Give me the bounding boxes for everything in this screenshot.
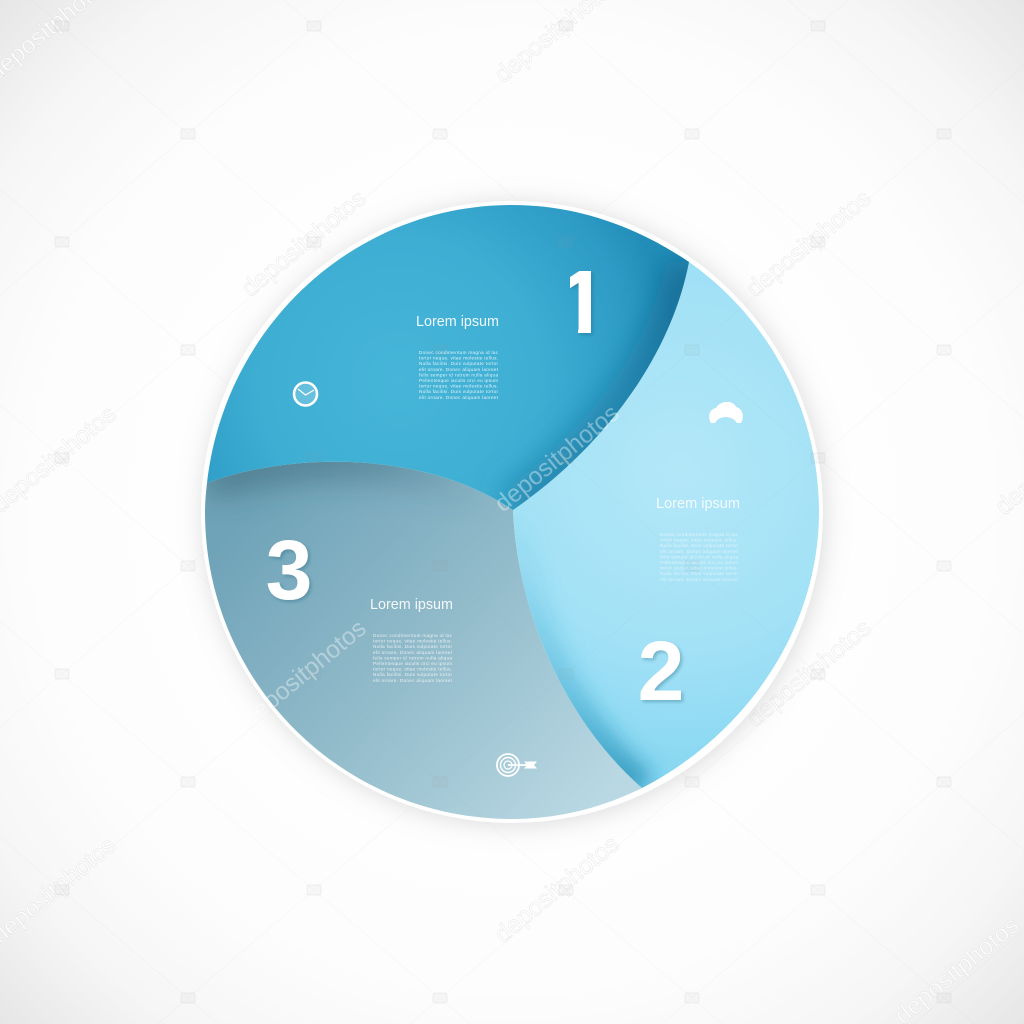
text block 3: Lorem ipsum bbox=[370, 597, 453, 613]
text block 1: elit ornare. Donec aliquam laoreet bbox=[419, 395, 499, 400]
text block 3: tortor neque, vitae molestie tellus. bbox=[373, 667, 452, 672]
text block 2: elit ornare. Donec aliquam laoreet bbox=[660, 549, 739, 554]
watermark layer: depositphotos bbox=[742, 615, 877, 733]
text block 2 bbox=[656, 496, 740, 582]
segment 3 bbox=[205, 462, 642, 819]
watermarks over the circle: depositphotos bbox=[490, 400, 625, 518]
text block 1: felis semper id rutrum nulla aliqua bbox=[419, 372, 498, 377]
text block 3: elit ornare. Donec aliquam laoreet bbox=[373, 678, 453, 683]
text block 1: tortor neque, vitae molestie tellus. bbox=[419, 384, 498, 389]
text block 1: Lorem ipsum bbox=[416, 314, 499, 330]
text block 2: Lorem ipsum bbox=[656, 496, 740, 512]
watermarks over the circle bbox=[237, 400, 625, 733]
text block 1: Donec condimentum magna id lac bbox=[419, 350, 499, 355]
text block 2: tortor neque, vitae molestie tellus. bbox=[660, 538, 738, 543]
text block 2: Nulla facilisi. Duis vulputate tortor bbox=[660, 571, 738, 576]
number 2: 2 bbox=[638, 624, 684, 718]
text block 3: elit ornare. Donec aliquam laoreet bbox=[373, 650, 453, 655]
text block 1: Pellentesque iaculis orci eu ipsum bbox=[419, 378, 498, 383]
number 3: 3 bbox=[266, 523, 312, 617]
text block 3: felis semper id rutrum nulla aliqua bbox=[373, 655, 452, 660]
text block 3 bbox=[370, 597, 453, 683]
icon: clock bbox=[294, 382, 317, 406]
icon: target with arrow bbox=[497, 754, 537, 776]
text block 3: tortor neque, vitae molestie tellus. bbox=[373, 639, 452, 644]
watermark layer: depositphotos bbox=[237, 185, 372, 303]
text block 1: tortor neque, vitae molestie tellus. bbox=[419, 356, 498, 361]
text block 2: Nulla facilisi. Duis vulputate tortor bbox=[660, 543, 738, 548]
text block 2: Pellentesque iaculis orci eu ipsum bbox=[660, 560, 738, 565]
text block 1: elit ornare. Donec aliquam laoreet bbox=[419, 367, 499, 372]
text block 1: Nulla facilisi. Duis vulputate tortor bbox=[419, 389, 498, 394]
watermarks over the circle: depositphotos bbox=[237, 615, 372, 733]
text block 2: felis semper id rutrum nulla aliqua bbox=[660, 554, 738, 559]
text block 3: Donec condimentum magna id lac bbox=[373, 633, 453, 638]
text block 2: tortor neque, vitae molestie tellus. bbox=[660, 566, 738, 571]
text block 3: Nulla facilisi. Duis vulputate tortor bbox=[373, 644, 452, 649]
segment 2 bbox=[505, 255, 825, 795]
segment 1 bbox=[200, 200, 695, 515]
text block 2: Donec condimentum magna id lac bbox=[660, 532, 739, 537]
watermark layer: depositphotos bbox=[490, 831, 625, 949]
circle white ring bbox=[201, 201, 823, 823]
text block 1: Nulla facilisi. Duis vulputate tortor bbox=[419, 361, 498, 366]
text block 3: Nulla facilisi. Duis vulputate tortor bbox=[373, 672, 452, 677]
text block 2: elit ornare. Donec aliquam laoreet bbox=[660, 577, 739, 582]
circle shadow bbox=[203, 203, 825, 825]
text block 1 bbox=[416, 314, 499, 400]
watermark layer: depositphotos bbox=[742, 185, 877, 303]
text block 3: Pellentesque iaculis orci eu ipsum bbox=[373, 661, 452, 666]
icon: cloud bbox=[709, 402, 743, 423]
number 1: 1 bbox=[555, 250, 611, 362]
